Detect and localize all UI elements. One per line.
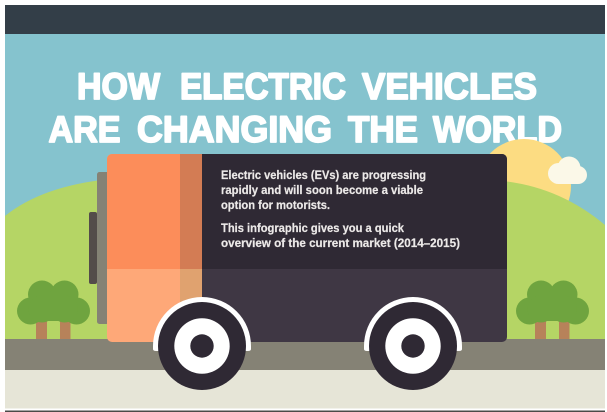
front wheel bbox=[153, 297, 251, 390]
icon: sun bbox=[477, 139, 571, 233]
road bbox=[5, 339, 605, 370]
title: VEHICLES bbox=[362, 65, 537, 107]
sky background bbox=[5, 34, 605, 344]
truck rear bumper bbox=[97, 172, 109, 324]
title: WORLD bbox=[433, 108, 562, 150]
title: CHANGING bbox=[137, 108, 332, 150]
trees: right bbox=[516, 280, 589, 340]
truck body bbox=[107, 154, 507, 342]
intro text: option for motorists. bbox=[221, 200, 330, 212]
bottom dark edge bbox=[5, 410, 605, 412]
rear wheel bbox=[364, 297, 462, 390]
trees: left bbox=[17, 280, 90, 340]
title: ARE bbox=[48, 108, 120, 150]
intro text bbox=[221, 170, 460, 250]
title: HOW bbox=[77, 65, 161, 107]
truck bbox=[89, 154, 507, 390]
title: ELECTRIC bbox=[180, 65, 346, 107]
intro text: overview of the current market (2014–2015) bbox=[221, 238, 460, 250]
left hill bbox=[5, 179, 110, 340]
title bbox=[48, 65, 562, 150]
top dark bar bbox=[5, 5, 605, 34]
intro text: This infographic gives you a quick bbox=[221, 223, 405, 235]
icon: cloud bbox=[548, 156, 587, 184]
right hill bbox=[490, 180, 605, 340]
pavement bbox=[5, 370, 605, 408]
truck rear handle bbox=[89, 212, 97, 284]
intro text: rapidly and will soon become a viable bbox=[221, 185, 423, 197]
title: THE bbox=[348, 108, 418, 150]
intro text: Electric vehicles (EVs) are progressing bbox=[221, 170, 426, 182]
